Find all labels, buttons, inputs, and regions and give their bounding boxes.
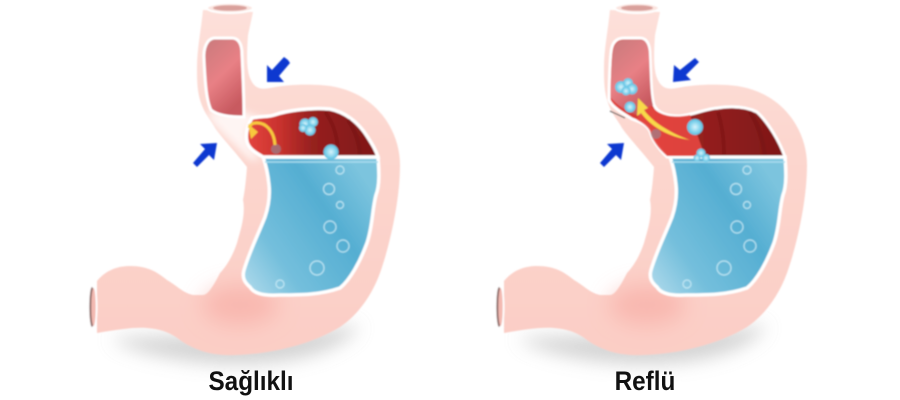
blue arrow: upper (673, 58, 699, 82)
gas bubbles (299, 117, 338, 160)
stomach acid (243, 157, 379, 295)
blue arrow: lower (193, 143, 217, 167)
stomach acid (650, 157, 786, 295)
esophagus opening (615, 3, 659, 13)
pylorus opening (88, 281, 98, 333)
stomach body (97, 10, 400, 355)
pale junction (206, 112, 268, 160)
valve mark (610, 111, 625, 118)
pylorus opening (496, 281, 504, 333)
stomach gas chamber (246, 108, 378, 157)
reflux red lower (636, 105, 705, 156)
label: reflux: Reflü (615, 367, 675, 396)
acid surface highlight (265, 161, 378, 163)
blue arrow: upper (267, 57, 290, 82)
shadow under stomach (110, 325, 360, 364)
chamber folds (325, 112, 360, 155)
blue arrow: lower (600, 143, 624, 167)
chamber folds (718, 112, 765, 155)
shadow under stomach (517, 325, 767, 364)
label: healthy: Sağlıklı (208, 367, 294, 396)
esophagus opening (207, 3, 253, 13)
yellow reflux arrow (637, 98, 690, 140)
acid surface highlight (672, 161, 785, 163)
figure: healthy stomach (88, 3, 400, 364)
esophagus lining tint (611, 40, 653, 116)
stomach body (504, 10, 807, 355)
reflux cavity (609, 38, 785, 157)
stomach shading (202, 285, 278, 325)
yellow curved arrow (248, 123, 275, 145)
stomach shading (609, 285, 685, 325)
acid bubbles (683, 166, 756, 288)
acid bubbles (276, 166, 349, 288)
figure: reflux stomach (496, 3, 807, 364)
esophagus cavity (204, 38, 244, 117)
gas bubbles (615, 78, 710, 162)
